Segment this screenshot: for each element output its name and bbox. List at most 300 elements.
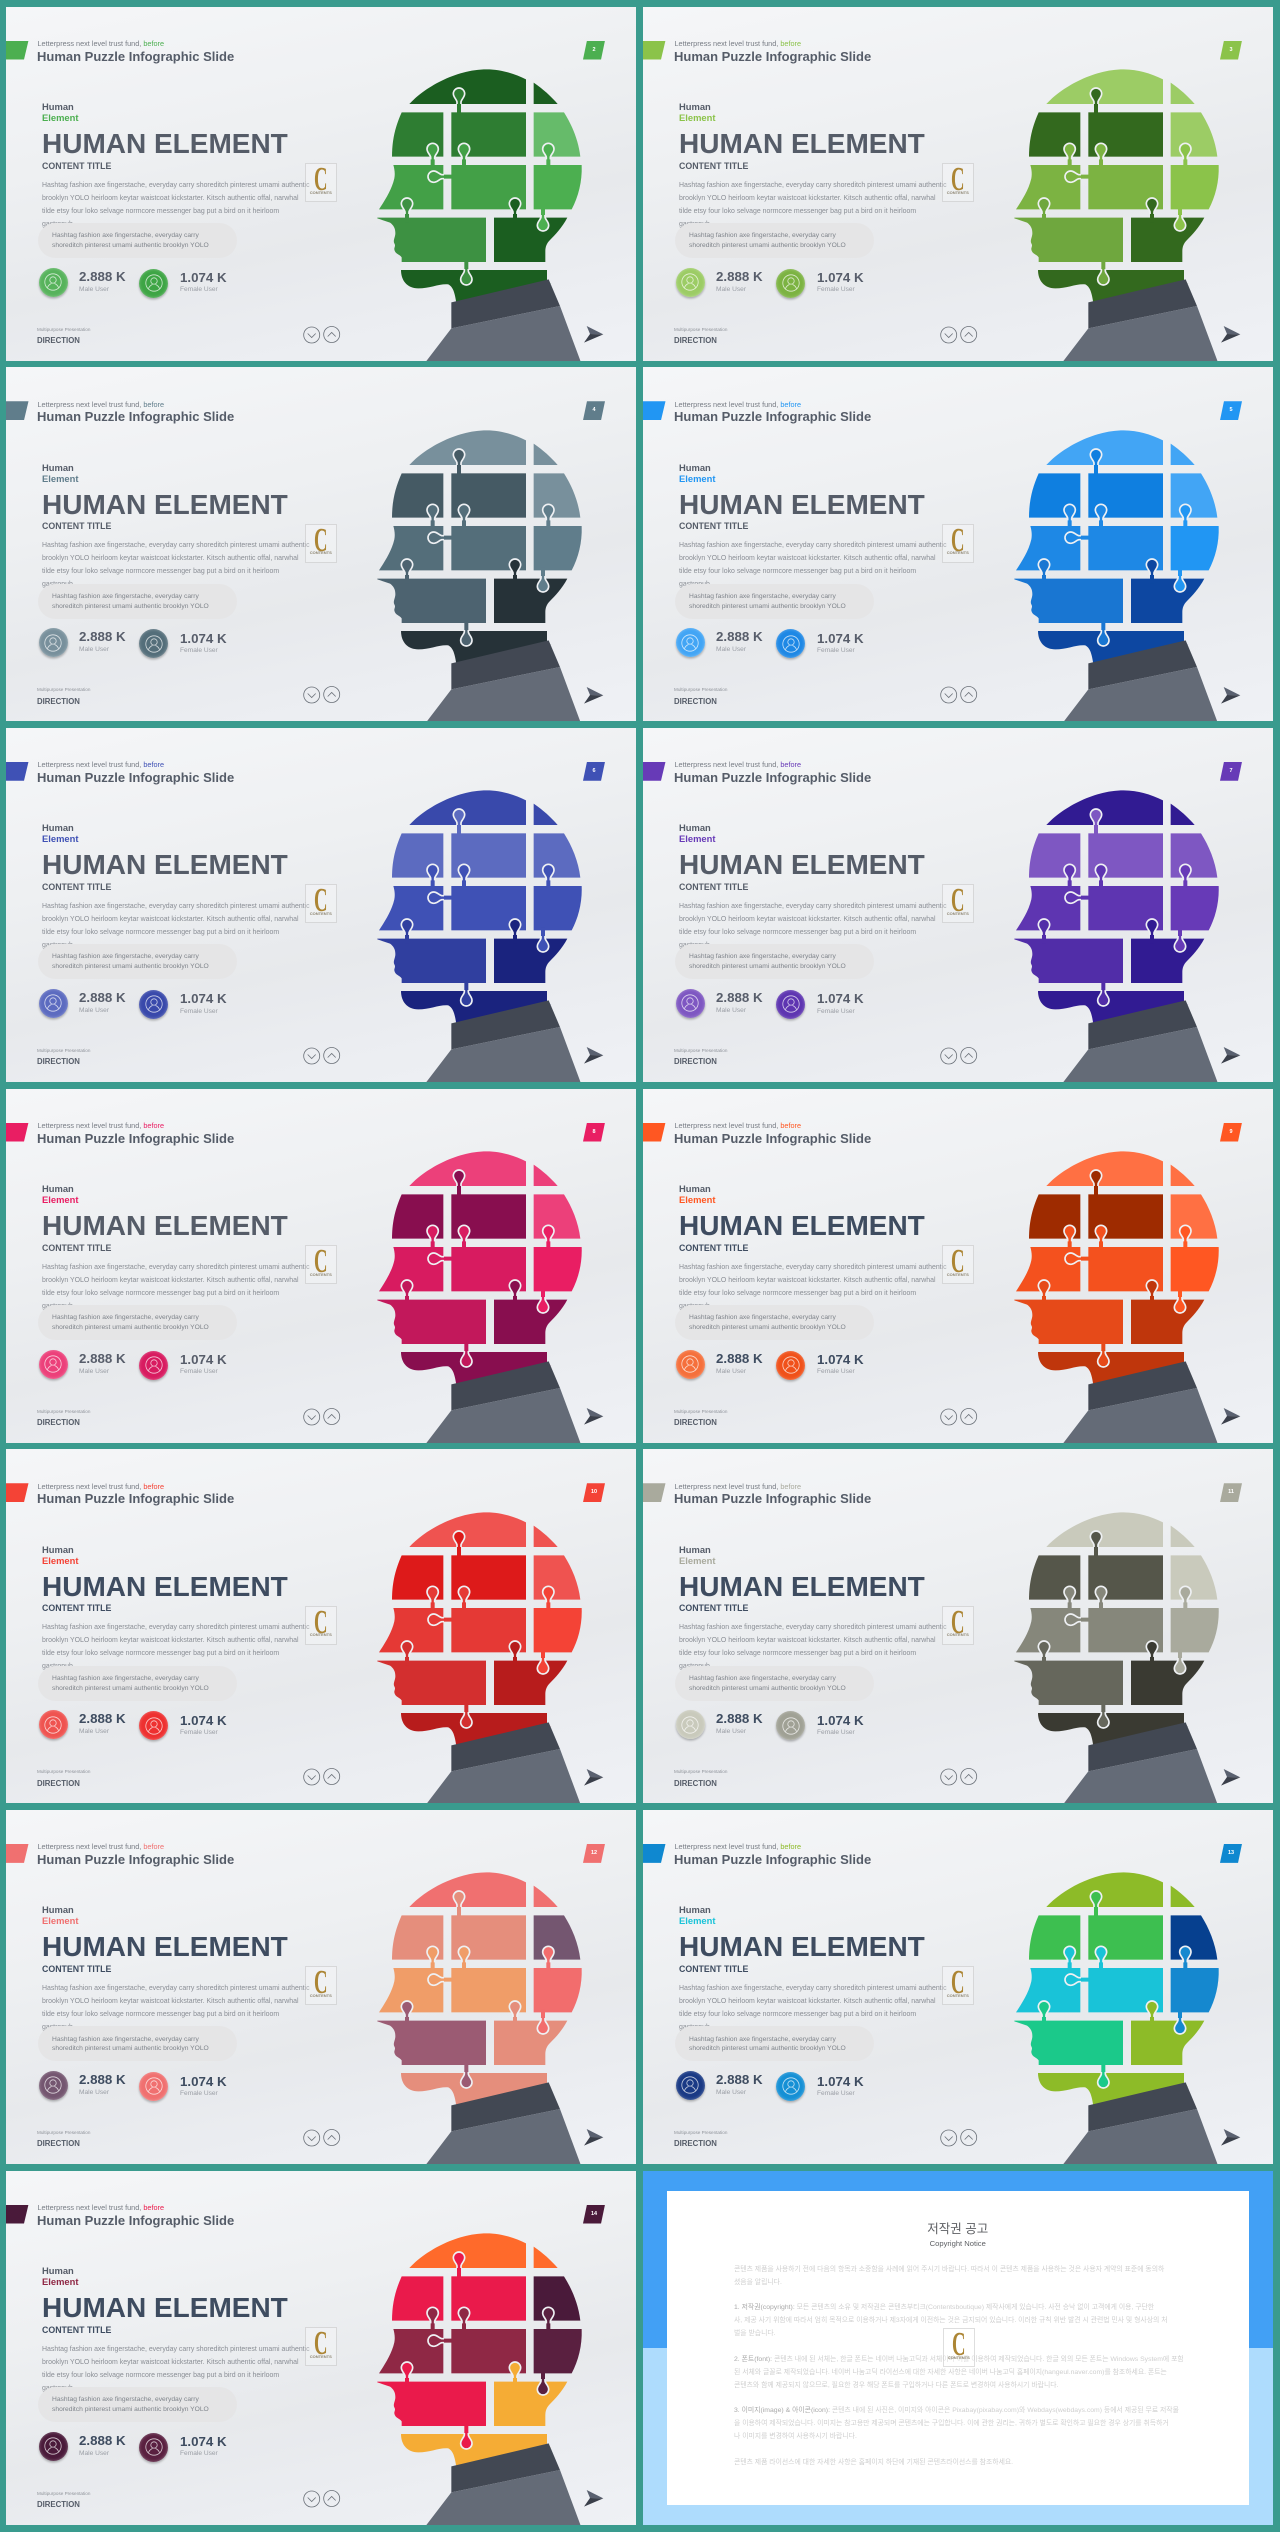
body text: Hashtag fashion axe fingerstache, everyday carry shoreditch pinterest umami authentic [679, 542, 947, 549]
slide title: Human Puzzle Infographic Slide [674, 409, 871, 424]
quote pill [38, 2026, 237, 2061]
icon: male user [39, 1350, 68, 1378]
icon: nav arrows [303, 326, 340, 344]
logo [942, 1606, 974, 1645]
logo: CONTENTS [310, 190, 332, 194]
label: Human [679, 1544, 711, 1555]
logo [305, 1245, 336, 1284]
panel: slide 6 indigo [6, 728, 636, 1082]
label accent: Element [679, 833, 715, 844]
page number: 5 [1229, 407, 1233, 413]
pill text: shoreditch pinterest umami authentic brooklyn YOLO [52, 242, 209, 249]
header tab [643, 1483, 666, 1502]
body text: Hashtag fashion axe fingerstache, everyday carry shoreditch pinterest umami authentic [42, 1624, 310, 1631]
slide title: Human Puzzle Infographic Slide [37, 48, 234, 64]
stat label: Female User [817, 1729, 855, 1736]
header tab [6, 1483, 28, 1502]
body text: gastropub. [42, 942, 75, 949]
icon: female user [776, 1711, 805, 1740]
notice body: 셨음을 알립니다. [734, 2278, 782, 2286]
pill text: Hashtag fashion axe fingerstache, everyday carry [689, 1675, 836, 1682]
slide title: Human Puzzle Infographic Slide [674, 1130, 871, 1146]
body text: brooklyn YOLO heirloom keytar waistcoat kickstarter. Kitsch authentic offal, narwhal [679, 916, 936, 923]
body text: tilde etsy four loko selvage normcore messenger bag put a bird on it heirloom [679, 1650, 916, 1657]
heading: HUMAN ELEMENT [42, 1571, 288, 1602]
stat label: Male User [79, 286, 109, 293]
page number [583, 762, 605, 781]
footer title: DIRECTION [674, 1779, 717, 1788]
panel: slide 2 green [6, 6, 636, 361]
footer title: DIRECTION [37, 2500, 80, 2509]
pill text [52, 232, 209, 249]
label accent: Element [42, 112, 78, 123]
puzzle head [997, 1493, 1277, 1813]
label accent: Element [42, 1555, 78, 1566]
puzzle head [997, 771, 1277, 1091]
pill text: shoreditch pinterest umami authentic brooklyn YOLO [689, 242, 846, 249]
stat male: 2.888 K [716, 2072, 763, 2087]
body text [42, 1621, 310, 1673]
panel: slide 4 slate [6, 367, 636, 721]
stat label: Female User [180, 1729, 218, 1736]
stat female: 1.074 K [817, 1352, 864, 1367]
label: Human [679, 1183, 711, 1194]
heading: HUMAN ELEMENT [679, 849, 925, 880]
page number: 13 [1228, 1850, 1234, 1856]
eyebrow: Letterpress next level trust fund, before [674, 1482, 801, 1491]
notice card [666, 2191, 1249, 2505]
pill text: Hashtag fashion axe fingerstache, everyday carry [52, 593, 199, 600]
header tab [643, 1122, 666, 1142]
stat male: 2.888 K [79, 1350, 126, 1366]
stat male: 2.888 K [716, 1711, 763, 1726]
logo [305, 1966, 336, 2005]
page number [1220, 1122, 1242, 1142]
panel: slide 5 blue [643, 367, 1273, 721]
stat label: Male User [79, 2450, 109, 2457]
notice body: 콘텐츠 제품을 사용하기 전에 다음의 항목과 소중함을 사례에 읽어 주시기 바랍니다. 따라서 이 콘텐츠 제품을 사용하는 것은 사용자 계약의 표준에 동의하 [734, 2266, 1164, 2272]
notice subtitle: Copyright Notice [930, 2239, 986, 2248]
footer title: DIRECTION [674, 1057, 717, 1066]
heading: HUMAN ELEMENT [42, 489, 288, 520]
pill text: Hashtag fashion axe fingerstache, everyday carry [52, 1314, 199, 1321]
icon: nav arrows [301, 1406, 343, 1428]
icon: male user [39, 268, 68, 296]
body text: brooklyn YOLO heirloom keytar waistcoat kickstarter. Kitsch authentic offal, narwhal [679, 555, 936, 562]
notice body: 사, 제공 사기 위함에 따라서 엄히 목적으로 이용하거나 제3자에게 이전하는 것은 금지되어 있습니다. 이러한 규칙 위반 발견 시 관련법 민사 및 형사상의 처 [734, 2317, 1168, 2324]
pill text: shoreditch pinterest umami authentic brooklyn YOLO [689, 603, 846, 610]
body text [42, 182, 310, 228]
icon: female user [139, 2072, 168, 2101]
header tab [6, 401, 28, 420]
icon: male user [676, 989, 705, 1018]
header tab [643, 40, 666, 60]
stat label: Female User [817, 286, 855, 293]
icon: male user [39, 628, 68, 657]
body text: Hashtag fashion axe fingerstache, everyday carry shoreditch pinterest umami authentic [42, 542, 310, 549]
notice body: 콘텐츠와 함께 제공되지 않으므로, 필요한 경우 해당 폰트를 구입하거나 다른 폰트로 변경하여 사용하시기 바랍니다. [734, 2382, 1058, 2388]
stat label: Female User [817, 2090, 855, 2097]
stat male: 2.888 K [716, 629, 763, 644]
stat female: 1.074 K [180, 1713, 227, 1728]
page number [583, 40, 605, 60]
footer note: Multipurpose Presentation [674, 687, 727, 692]
stat female: 1.074 K [180, 2074, 227, 2089]
logo: CONTENTS [310, 2354, 332, 2358]
pill text: shoreditch pinterest umami authentic brooklyn YOLO [689, 1324, 846, 1331]
page number: 6 [592, 768, 596, 774]
body text [42, 900, 310, 952]
logo: CONTENTS [310, 1272, 332, 1276]
body text [679, 542, 947, 588]
footer title: DIRECTION [37, 1057, 80, 1066]
notice body: 3. 이미지(image) & 아이콘(icon): 콘텐츠 내에 된 사진은, 이미지와 아이콘은 Pixabay(pixabay.com)와 Webdays(webdays.com) 등에서 제공된 무료 저작물 [734, 2407, 1179, 2414]
page number [1220, 762, 1242, 781]
body text: tilde etsy four loko selvage normcore messenger bag put a bird on it heirloom [42, 2372, 279, 2378]
stat label: Male User [716, 646, 746, 653]
icon: nav arrows [303, 686, 340, 704]
icon: female user [776, 268, 805, 298]
label: Human [679, 1904, 711, 1915]
quote pill [675, 584, 874, 619]
stat male: 2.888 K [79, 990, 126, 1005]
page number [1220, 40, 1242, 60]
notice body: 나 이미지를 변경하여 사용하시기 바랍니다. [734, 2433, 857, 2440]
logo [943, 2328, 974, 2367]
logo: CONTENTS [310, 1993, 332, 1998]
notice body: 된 서체와 글꼴로 제작되었습니다. 네이버 나눔고딕 라이선스에 대한 자세한 사항은 네이버 나눔고딕 홈페이지(hangeul.naver.com)를 참조하세요. 폰트는 [734, 2368, 1167, 2376]
icon: female user [139, 990, 168, 1019]
header tab [6, 1844, 28, 1863]
eyebrow: Letterpress next level trust fund, before [674, 39, 801, 48]
logo: CONTENTS [310, 1632, 332, 1637]
pill text: shoreditch pinterest umami authentic brooklyn YOLO [52, 1324, 209, 1331]
subheading: CONTENT TITLE [679, 882, 748, 892]
notice body: 벌을 받습니다. [734, 2330, 776, 2337]
icon: male user [39, 2071, 68, 2100]
eyebrow: Letterpress next level trust fund, before [38, 1121, 164, 1130]
body text: tilde etsy four loko selvage normcore messenger bag put a bird on it heirloom [679, 568, 916, 575]
puzzle head [377, 430, 604, 721]
pill text: Hashtag fashion axe fingerstache, everyday carry [689, 232, 836, 239]
body text: Hashtag fashion axe fingerstache, everyday carry shoreditch pinterest umami authentic [42, 903, 310, 910]
pill text [689, 232, 846, 249]
label accent: Element [42, 833, 78, 844]
eyebrow: Letterpress next level trust fund, before [674, 1121, 801, 1130]
body text: brooklyn YOLO heirloom keytar waistcoat kickstarter. Kitsch authentic offal, narwhal [42, 1637, 299, 1644]
stat female: 1.074 K [180, 631, 227, 646]
slide title: Human Puzzle Infographic Slide [674, 48, 871, 64]
logo [942, 1966, 974, 2005]
pill text: shoreditch pinterest umami authentic brooklyn YOLO [52, 963, 209, 970]
subheading: CONTENT TITLE [42, 161, 111, 171]
stat label: Male User [79, 1007, 109, 1014]
page number: 14 [591, 2210, 597, 2216]
footer note: Multipurpose Presentation [674, 1769, 727, 1774]
pill text: Hashtag fashion axe fingerstache, everyday carry [689, 1314, 836, 1321]
body text: brooklyn YOLO heirloom keytar waistcoat kickstarter. Kitsch authentic offal, narwhal [42, 1998, 299, 2005]
body text [679, 900, 947, 952]
stat label: Female User [817, 1008, 855, 1015]
panel: copyright notice [643, 2171, 1273, 2525]
pill text: Hashtag fashion axe fingerstache, everyday carry [52, 1675, 199, 1682]
notice body: 1. 저작권(copyright): 모든 콘텐츠의 소유 및 저작권은 콘텐츠부티크(Contentsboutique) 제작사에게 있습니다. 사전 승낙 없이 고객에게 이용, 구단한 [734, 2304, 1154, 2311]
icon: female user [139, 1350, 168, 1380]
stat label: Male User [716, 1368, 746, 1375]
logo: CONTENTS [947, 190, 969, 194]
logo [305, 884, 336, 923]
label: Human [42, 822, 74, 833]
body text: gastropub. [679, 581, 712, 588]
label accent: Element [42, 2276, 78, 2287]
logo: CONTENTS [947, 1993, 969, 1998]
pill text [689, 952, 846, 972]
body text [42, 2342, 310, 2394]
heading: HUMAN ELEMENT [679, 128, 925, 159]
stat male: 2.888 K [716, 990, 763, 1005]
logo: CONTENTS [947, 550, 969, 555]
stat female: 1.074 K [817, 631, 864, 646]
logo: CONTENTS [310, 911, 332, 916]
icon: female user [776, 1350, 805, 1380]
eyebrow: Letterpress next level trust fund, before [38, 1482, 164, 1491]
icon: nav arrows [938, 1406, 980, 1428]
icon: nav arrows [938, 2127, 980, 2149]
icon: nav arrows [938, 1766, 980, 1788]
body text: Hashtag fashion axe fingerstache, everyday carry shoreditch pinterest umami authentic [679, 1624, 947, 1631]
puzzle head [360, 771, 640, 1091]
pill text: Hashtag fashion axe fingerstache, everyday carry [689, 593, 836, 600]
logo [305, 1606, 336, 1645]
body text: Hashtag fashion axe fingerstache, everyday carry shoreditch pinterest umami authentic [679, 903, 947, 910]
body text [42, 1260, 310, 1312]
body text: tilde etsy four loko selvage normcore messenger bag put a bird on it heirloom [42, 208, 279, 214]
subheading: CONTENT TITLE [42, 1603, 111, 1613]
stat female: 1.074 K [817, 2074, 864, 2089]
heading: HUMAN ELEMENT [679, 1931, 925, 1962]
body text: tilde etsy four loko selvage normcore messenger bag put a bird on it heirloom [42, 929, 279, 936]
label accent: Element [679, 1915, 715, 1926]
slide title: Human Puzzle Infographic Slide [37, 770, 234, 785]
icon: nav arrows [301, 1766, 343, 1788]
heading: HUMAN ELEMENT [42, 849, 288, 880]
stat male: 2.888 K [79, 2432, 126, 2448]
panel: slide 14 multicolour warm [6, 2170, 636, 2525]
quote pill [38, 223, 237, 258]
label accent: Element [679, 1194, 715, 1205]
body text: Hashtag fashion axe fingerstache, everyday carry shoreditch pinterest umami authentic [42, 2346, 310, 2352]
quote pill [675, 1666, 874, 1701]
subheading: CONTENT TITLE [679, 1964, 748, 1974]
body text: gastropub. [679, 220, 712, 228]
stat male: 2.888 K [79, 268, 126, 284]
body text: gastropub. [42, 220, 75, 228]
heading: HUMAN ELEMENT [42, 1210, 288, 1241]
header tab [643, 1844, 666, 1863]
heading: HUMAN ELEMENT [679, 1210, 925, 1241]
stat label: Male User [716, 2089, 746, 2096]
body text: brooklyn YOLO heirloom keytar waistcoat kickstarter. Kitsch authentic offal, narwhal [42, 555, 299, 562]
icon: male user [39, 1710, 68, 1739]
body text: tilde etsy four loko selvage normcore messenger bag put a bird on it heirloom [679, 1290, 916, 1296]
slide title: Human Puzzle Infographic Slide [674, 1491, 871, 1506]
page number: 3 [1229, 46, 1233, 52]
icon: male user [676, 628, 705, 657]
label: Human [42, 2265, 74, 2276]
stat label: Female User [180, 286, 218, 293]
stat female: 1.074 K [180, 1352, 227, 1367]
stat male: 2.888 K [79, 1711, 126, 1726]
page number [583, 1844, 605, 1863]
pill text [689, 1313, 846, 1333]
footer note: Multipurpose Presentation [37, 1409, 90, 1414]
body text: brooklyn YOLO heirloom keytar waistcoat kickstarter. Kitsch authentic offal, narwhal [679, 1998, 936, 2005]
puzzle head [377, 69, 604, 361]
subheading: CONTENT TITLE [42, 521, 111, 531]
page number [583, 401, 605, 420]
stat female: 1.074 K [817, 1713, 864, 1728]
footer note: Multipurpose Presentation [674, 1409, 727, 1414]
notice body [734, 2262, 1183, 2481]
stat female: 1.074 K [180, 2434, 227, 2449]
icon: male user [676, 1710, 705, 1739]
stat label: Female User [180, 2090, 218, 2097]
label: Human [679, 101, 711, 112]
icon: male user [39, 989, 68, 1018]
quote pill [38, 944, 237, 979]
body text: tilde etsy four loko selvage normcore messenger bag put a bird on it heirloom [679, 2011, 916, 2018]
panel: slide 13 multicolour cool [643, 1810, 1273, 2164]
puzzle head [360, 1493, 640, 1813]
body text: gastropub. [42, 2384, 75, 2392]
footer title: DIRECTION [37, 1779, 80, 1788]
body text: tilde etsy four loko selvage normcore messenger bag put a bird on it heirloom [679, 208, 916, 214]
stat female: 1.074 K [180, 991, 227, 1006]
logo: CONTENTS [947, 911, 969, 916]
icon: male user [676, 268, 705, 296]
puzzle head [1014, 430, 1240, 721]
pill text: shoreditch pinterest umami authentic brooklyn YOLO [689, 2045, 846, 2052]
pill text: Hashtag fashion axe fingerstache, everyday carry [52, 2396, 199, 2403]
stat female: 1.074 K [817, 991, 864, 1006]
footer title: DIRECTION [674, 697, 717, 706]
eyebrow: Letterpress next level trust fund, before [674, 1842, 801, 1851]
quote pill [38, 584, 237, 619]
subheading: CONTENT TITLE [679, 1603, 748, 1613]
quote pill [675, 1305, 874, 1340]
icon: male user [39, 2432, 68, 2460]
body text: gastropub. [42, 2024, 75, 2031]
body text: tilde etsy four loko selvage normcore messenger bag put a bird on it heirloom [42, 1290, 279, 1296]
page number [583, 1483, 605, 1502]
body text: gastropub. [42, 581, 75, 588]
stat label: Male User [79, 2089, 109, 2096]
quote pill [38, 2387, 237, 2422]
page number: 12 [591, 1850, 597, 1856]
body text: gastropub. [42, 1302, 75, 1310]
body text [679, 182, 947, 228]
eyebrow: Letterpress next level trust fund, before [38, 2203, 164, 2212]
notice body: 콘텐츠 제품 라이선스에 대한 자세한 사항은 홈페이지 하단에 기재된 콘텐츠라이선스를 참조하세요. [734, 2458, 1013, 2466]
label: Human [679, 822, 711, 833]
header tab [6, 1122, 28, 1142]
label: Human [42, 1544, 74, 1555]
pill text [52, 2035, 209, 2054]
pill text [52, 952, 209, 972]
subheading: CONTENT TITLE [42, 1964, 111, 1974]
header tab [6, 762, 28, 781]
heading: HUMAN ELEMENT [42, 2292, 288, 2323]
icon: nav arrows [940, 326, 978, 344]
heading: HUMAN ELEMENT [679, 1571, 925, 1602]
panel: slide 3 light green [643, 6, 1273, 361]
stat label: Male User [79, 1728, 109, 1735]
stat male: 2.888 K [79, 2072, 126, 2087]
stat label: Female User [180, 1368, 218, 1375]
label accent: Element [42, 1915, 78, 1926]
page number [583, 2204, 605, 2224]
body text: Hashtag fashion axe fingerstache, everyday carry shoreditch pinterest umami authentic [42, 182, 310, 188]
body text: Hashtag fashion axe fingerstache, everyday carry shoreditch pinterest umami authentic [679, 1985, 947, 1992]
label: Human [42, 1183, 74, 1194]
notice body: 2. 폰트(font): 콘텐츠 내에 된 서체는, 한글 폰트는 네이버 나눔고딕과 서체이며 이를 이용하여 제작되었습니다. 한글 외의 모든 폰트는 Windows System에 포함 [734, 2356, 1183, 2362]
panel: slide 12 coral [6, 1810, 636, 2164]
footer title: DIRECTION [674, 2139, 717, 2148]
icon: nav arrows [301, 1045, 343, 1067]
pill text [52, 1313, 209, 1333]
label accent: Element [679, 1555, 715, 1566]
slide title: Human Puzzle Infographic Slide [37, 409, 234, 424]
body text: tilde etsy four loko selvage normcore messenger bag put a bird on it heirloom [42, 568, 279, 575]
icon: nav arrows [301, 2488, 343, 2510]
panel: slide 9 orange [643, 1088, 1273, 1443]
stat label: Male User [716, 1728, 746, 1735]
puzzle head [360, 2214, 640, 2532]
notice body: 을 이용하여 제작되었습니다. 이미지는 참고용만 제공되며 콘텐츠에는 구입합니다. 이에 관한 권리는, 귀하가 별도로 확인하고 필요한 경우 상기를 취득하거 [734, 2420, 1169, 2427]
label accent: Element [679, 112, 715, 123]
logo [305, 2327, 336, 2366]
page number: 9 [1229, 1128, 1233, 1134]
body text: brooklyn YOLO heirloom keytar waistcoat kickstarter. Kitsch authentic offal, narwhal [42, 194, 299, 202]
subheading: CONTENT TITLE [42, 1243, 111, 1253]
footer note: Multipurpose Presentation [37, 327, 90, 332]
footer title: DIRECTION [37, 1418, 80, 1427]
header tab [643, 401, 666, 420]
logo: CONTENTS [948, 2354, 970, 2360]
footer title: DIRECTION [37, 336, 80, 345]
body text [679, 1621, 947, 1673]
page number: 11 [1228, 1489, 1234, 1495]
stat label: Male User [79, 1368, 109, 1375]
page number: 2 [592, 46, 596, 52]
footer note: Multipurpose Presentation [37, 1769, 90, 1774]
pill text: shoreditch pinterest umami authentic brooklyn YOLO [52, 2406, 209, 2413]
subheading: CONTENT TITLE [679, 1243, 748, 1253]
puzzle head [360, 1132, 640, 1452]
slide title: Human Puzzle Infographic Slide [37, 1852, 234, 1867]
logo [305, 163, 336, 202]
footer title: DIRECTION [37, 2139, 80, 2148]
body text: Hashtag fashion axe fingerstache, everyday carry shoreditch pinterest umami authentic [42, 1264, 310, 1270]
slide title: Human Puzzle Infographic Slide [37, 1130, 234, 1146]
stat label: Female User [180, 647, 218, 654]
icon: female user [139, 629, 168, 658]
heading: HUMAN ELEMENT [42, 128, 288, 159]
icon: male user [676, 1350, 705, 1378]
body text: gastropub. [679, 1663, 712, 1670]
puzzle head [997, 1132, 1277, 1452]
stat label: Female User [180, 1008, 218, 1015]
